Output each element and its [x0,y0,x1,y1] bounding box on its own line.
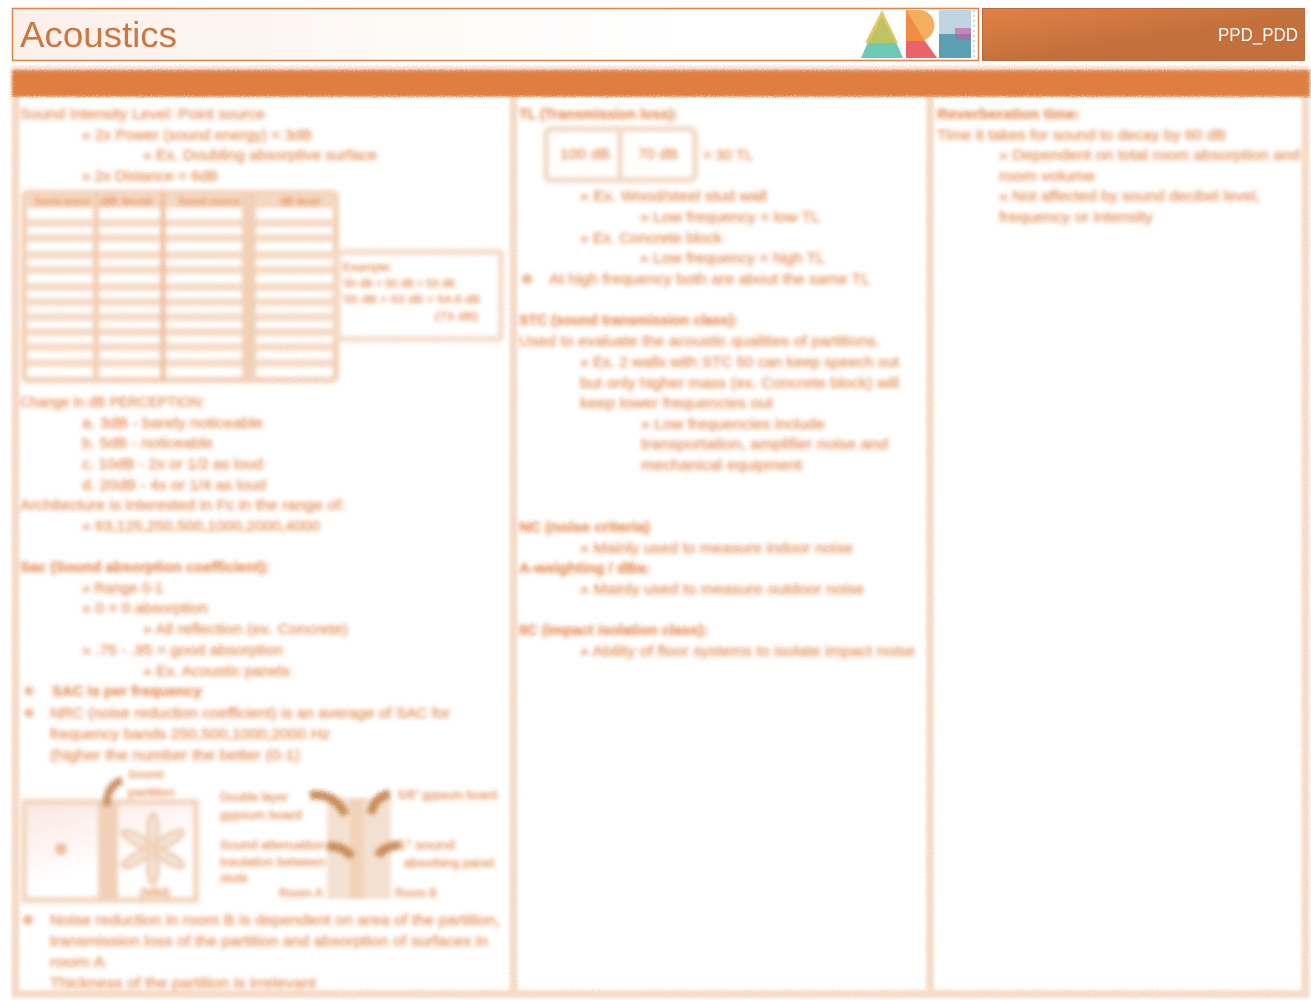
text block: noise reduction: transmission loss of the partition and absorption of surfaces in [50,933,488,950]
text block: sound transmission class: STC (sound transmission class): [519,312,738,329]
text block: sound absorption coefficient: » 0 = 0 absorption [82,600,208,617]
panel: left column [20,106,501,992]
text block: noise criteria and A-weighting: » Mainly used to measure outdoor noise [580,581,864,598]
diagram: transmission loss equation: 70 dB [638,146,678,163]
diagram: wall section: gypsum board [220,810,302,822]
text block: sound transmission class: but only higher mass (ex. Concrete block) will [580,375,899,392]
diagram: wall section: Room A [279,888,323,900]
text block: reverberation time: Reverberation time: [937,106,1080,123]
text block: noise criteria and A-weighting: » Mainly used to measure indoor noise [580,540,853,557]
diagram: room partition: (Mild) [140,887,170,899]
table: decibel levels: dB level [280,196,320,208]
text block: sound transmission class: » Low frequencies include [641,416,825,433]
text block: sound transmission class: keep lower frequencies out [580,395,774,412]
text block: transmission loss notes: » Ex. Wood/steel stud wall [580,188,767,205]
text block: noise reduction: Noise reduction in room B is dependent on area of the partition, [50,912,500,929]
title: Acoustics [20,14,177,55]
diagram: wall section: Room B [395,888,437,900]
header bar [12,70,1310,97]
callout: decibel addition example: (73 dB) [435,311,478,323]
diagram: wall section: 5/8" gypsum board [398,790,497,802]
diagram: transmission loss equation: 100 dB [560,146,610,163]
text block: noise criteria and A-weighting: NC (noise criteria) [519,519,650,536]
text block: impact isolation class [519,622,915,660]
text block: transmission loss: TL (Transmission loss): [519,106,678,123]
text block: reverberation time: room volume [999,168,1095,185]
text block: noise reduction: Thickness of the partition is irrelevant [50,975,317,992]
diagram: wall section [220,790,497,900]
text block: sound absorption coefficient: NRC (noise reduction coefficient) is an average of SAC for [50,705,450,722]
text block: sound absorption coefficient: » Range 0-1 [82,580,163,597]
text block: change in dB perception: a. 3dB - barely noticeable [82,415,263,432]
text block: sound transmission class: mechanical equipment [641,457,803,474]
icon: ARE logo [861,10,974,58]
text block: sound intensity level: » Ex. Doubling absorptive surface [143,147,377,164]
diagram: transmission loss equation [546,129,753,180]
text block: noise criteria and A-weighting: A-weighting / dBa: [519,560,650,577]
table: decibel levels [24,192,336,381]
diagram: room partition: Sound [128,769,163,781]
text block: change in dB perception [20,394,345,535]
text block: sound intensity level [20,106,377,185]
text block: change in dB perception: c. 10dB - 2x or 1/2 as loud [82,456,263,473]
text block: sound intensity level: » 2x Power (sound energy) = 3dB [82,127,312,144]
diagram: room partition [24,769,196,900]
text block: sound absorption coefficient: Sac (Sound absorption coefficient): [20,559,270,576]
text block: sound transmission class: transportation, amplifier noise and [641,436,888,453]
text block: sound intensity level: » 2x Distance = 6dB [82,168,218,185]
code banner [982,8,1304,60]
callout: decibel addition example: 50 dB + 53 dB = 54.8 dB [344,294,480,306]
text block: sound absorption coefficient: frequency bands 250,500,1000,2000 Hz [50,726,330,743]
text block: sound absorption coefficient [20,559,450,764]
text block: reverberation time [937,106,1300,226]
diagram: wall section: Double layer [220,792,288,804]
text block: transmission loss notes: » Low frequency = high TL [640,250,825,267]
text block: sound absorption coefficient: » .75 - .95 = good absorption [82,642,283,659]
text block: reverberation time: » Not affected by sound decibel level, [999,188,1260,205]
text block: change in dB perception: Architecture is interested in Fc in the range of: [20,497,345,514]
diagram: wall section: 1" sound [398,840,455,852]
panel: right column [937,106,1300,226]
text block: transmission loss notes: » Ex. Concrete block [580,230,723,247]
diagram: room partition: partition [128,787,175,799]
diagram: wall section: absorbing panel [404,858,494,870]
panel: middle column [519,106,915,660]
callout: decibel addition example [338,252,501,339]
table: decibel levels: dB level [100,196,152,208]
table: decibel levels: Sound source [34,196,90,208]
diagram: transmission loss equation: = 30 TL [703,147,753,164]
table: decibel levels: Sound source [178,196,240,208]
text block: sound absorption coefficient: » All reflection (ex. Concrete) [143,621,348,638]
text block: sound transmission class: » Ex. 2 walls with STC 50 can keep speech out [580,354,900,371]
text block: reverberation time: frequency or intensity [999,209,1154,226]
text block: sound absorption coefficient: (higher the number the better (0-1) [50,747,300,764]
text block: change in dB perception: Change in dB PERCEPTION: [20,394,205,411]
text block: change in dB perception: b. 5dB - noticeable [82,435,213,452]
course code: PPD_PDD [1218,24,1298,46]
text block: noise criteria and A-weighting [519,519,864,598]
text block: transmission loss notes: » Low frequency = low TL [640,209,820,226]
title box [12,8,978,60]
callout: decibel addition example: 50 dB + 50 dB = 53 dB [344,278,455,290]
text block: transmission loss notes: At high frequency both are about the same TL [549,271,870,288]
callout: decibel addition example: Example: [343,262,392,274]
text block: sound absorption coefficient: SAC is per frequency [52,683,203,700]
text block: sound transmission class: Used to evaluate the acoustic qualities of partitions. [519,333,880,350]
diagram: wall section: insulation between [220,857,325,869]
text block: reverberation time: » Dependent on total room absorption and [999,147,1300,164]
text block: change in dB perception: d. 20dB - 4x or 1/4 as loud [82,477,266,494]
diagram: wall section: studs [220,873,248,885]
text block: impact isolation class: IIC (impact isolation class): [519,622,708,639]
text block: noise reduction [23,912,500,992]
text block: impact isolation class: » Ability of floor systems to isolate impact noise [580,643,915,660]
text block: sound intensity level: Sound Intensity Level: Point source [20,106,265,123]
text block: transmission loss notes [522,188,870,288]
diagram: wall section: Sound attenuation [220,840,325,852]
text block: sound transmission class [519,312,900,474]
text block: noise reduction: room A [50,954,105,971]
text block: sound absorption coefficient: » Ex. Acoustic panels [143,663,290,680]
text block: change in dB perception: » 63,125,250,500,1000,2000,4000 [82,518,320,535]
text block: reverberation time: Time it takes for sound to decay by 60 dB [937,127,1226,144]
